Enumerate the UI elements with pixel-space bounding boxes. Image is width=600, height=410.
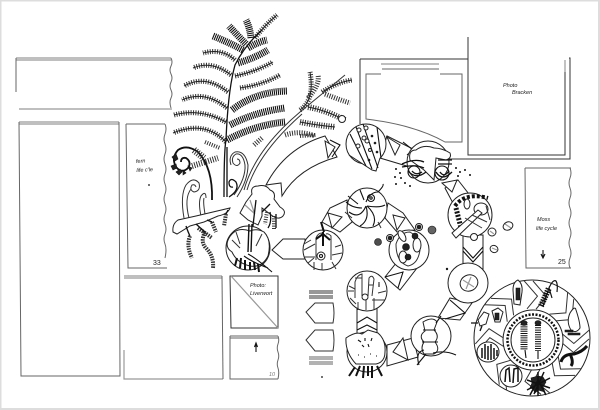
wheel chevrons <box>474 281 589 396</box>
illustration: rhizome and roots <box>173 208 230 268</box>
band: pentagon to gametophyte <box>272 239 305 259</box>
illustration: liverwort thallus <box>240 186 284 234</box>
band: oval to knot <box>438 298 472 320</box>
wheel: sporophyte with hook <box>541 281 557 306</box>
circle: knot plant <box>411 316 456 365</box>
caption: moss life cycle: Moss <box>537 217 550 223</box>
page number 25: 25 <box>558 259 566 266</box>
panel: fern life cycle caption <box>126 124 167 268</box>
band: blob to moss circle <box>357 305 377 335</box>
pinnae right <box>227 15 287 140</box>
panel: photo bracken <box>445 37 570 159</box>
page number 33: 33 <box>153 260 161 267</box>
key: small lines and pentagons <box>306 291 334 364</box>
band: long arc <box>266 136 337 196</box>
band: striped circle to sori <box>380 136 425 170</box>
panel: moss life cycle caption <box>525 168 571 268</box>
circle: spore sacs with dark spores <box>389 229 429 270</box>
stray specks <box>148 184 448 378</box>
caption: photo liverwort: Photo: <box>250 283 266 289</box>
band: rhizoid circle to archegonia <box>322 200 352 232</box>
panel: curved upper text box <box>360 59 468 142</box>
arrow: up <box>254 343 258 352</box>
spiral band segments <box>266 136 483 366</box>
circle: prothallus blob <box>346 330 387 378</box>
caption: moss life cycle: life cycle <box>536 226 557 232</box>
band: knot to blob <box>387 338 418 366</box>
caption: photo bracken: Bracken <box>512 90 532 96</box>
circle: oval spore <box>448 263 488 303</box>
wheel: capsule top <box>513 280 522 305</box>
panel: small caption box <box>230 336 279 379</box>
moss life cycle wheel <box>471 280 590 396</box>
wheel: embryo figures <box>471 308 503 331</box>
band: moss circle to spores <box>385 262 417 290</box>
caption: fern life cycle: life c'le <box>136 167 153 174</box>
panel: photo liverwort <box>230 276 278 328</box>
circle: gametophyte with fronds <box>226 224 272 272</box>
circle: fern sori on frond <box>402 141 452 183</box>
illustration: large fern frond <box>173 15 287 197</box>
band: cone to oval <box>463 235 483 270</box>
illustration: second fern frond <box>244 72 352 190</box>
dark spores drifting <box>374 224 436 246</box>
wheel: antheridia oval <box>477 342 499 362</box>
caption: fern life cycle: fern <box>136 159 146 165</box>
circle: rhizoid germination <box>345 184 387 228</box>
band: spores to rhizoid circle <box>385 203 415 232</box>
panel: top left text box <box>16 58 172 109</box>
arrow: down <box>541 250 545 258</box>
main stem <box>224 30 262 197</box>
wheel: protonema <box>561 346 587 366</box>
wheel: shoot cluster oval <box>500 365 522 387</box>
circle: striped sporangium <box>346 124 386 171</box>
page number 10: 10 <box>269 372 276 378</box>
panel: large left text column <box>19 122 120 376</box>
circle: moss capsule cone <box>448 193 492 240</box>
spores scatter near sori <box>394 167 471 187</box>
wheel: swollen capsule <box>565 308 580 335</box>
caption: photo bracken: Photo <box>503 83 517 89</box>
central moss plants <box>521 320 541 359</box>
pinnae left <box>173 26 246 142</box>
band: sori to cone <box>445 180 472 207</box>
illustration: fiddleheads <box>171 147 248 218</box>
circle: archegonia cells <box>303 222 343 270</box>
wheel: dark mat <box>527 372 550 396</box>
loose moss spores <box>488 220 514 254</box>
hub ring <box>503 310 563 370</box>
caption: photo liverwort: Liverwort <box>250 291 273 297</box>
circle: young moss cells <box>347 271 387 311</box>
panel: lower middle text box <box>124 276 223 379</box>
